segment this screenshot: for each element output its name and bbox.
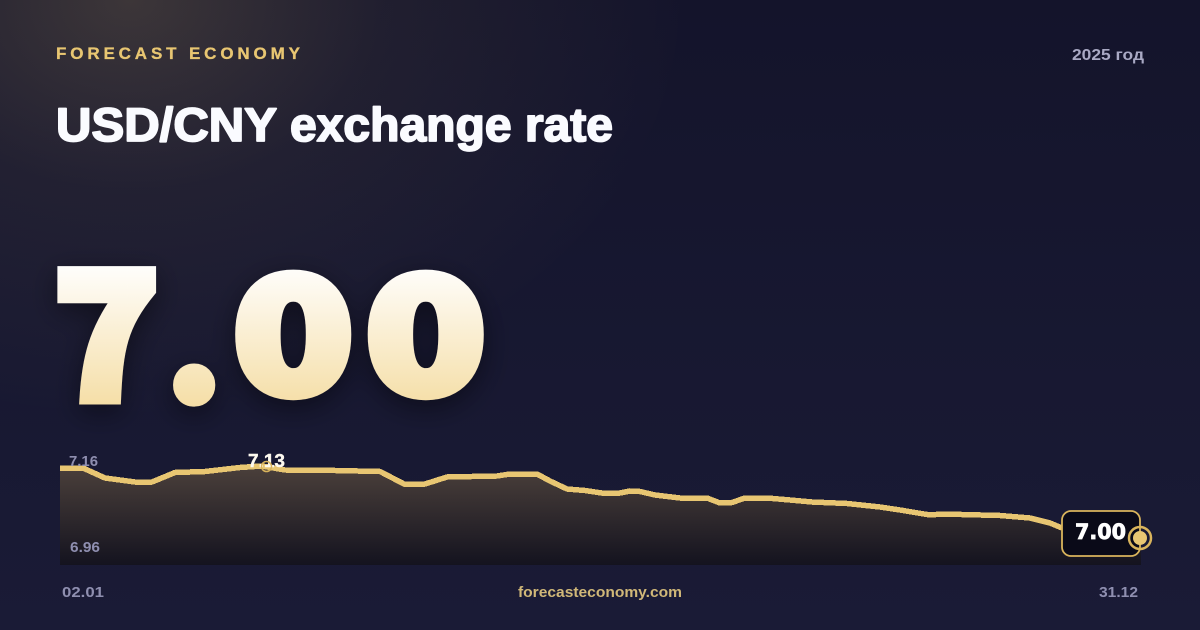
big value: 7	[54, 196, 159, 450]
start date: 02.01	[62, 584, 104, 601]
axis min label: 6.96	[70, 539, 100, 556]
current value callout: 7.00	[1075, 520, 1126, 544]
big value	[54, 196, 486, 450]
big value: 0	[233, 207, 353, 439]
chart: rate sparkline	[60, 450, 1151, 565]
peak value label: 7.13	[248, 450, 285, 471]
title	[56, 98, 613, 151]
website: forecasteconomy.com	[518, 584, 682, 601]
chart line	[60, 466, 1062, 528]
title: exchange rate	[290, 98, 613, 151]
axis max label: 7.16	[69, 453, 98, 470]
big value: 0	[366, 207, 486, 439]
big value: .	[168, 226, 221, 443]
current value callout	[1062, 511, 1140, 556]
end date: 31.12	[1099, 584, 1138, 601]
brand label: FORECAST ECONOMY	[56, 44, 301, 63]
current value marker	[1129, 527, 1151, 549]
peak marker	[262, 462, 272, 472]
year label: 2025 год	[1072, 47, 1144, 64]
chart area fill	[60, 466, 1141, 565]
title: USD/CNY	[56, 98, 277, 151]
